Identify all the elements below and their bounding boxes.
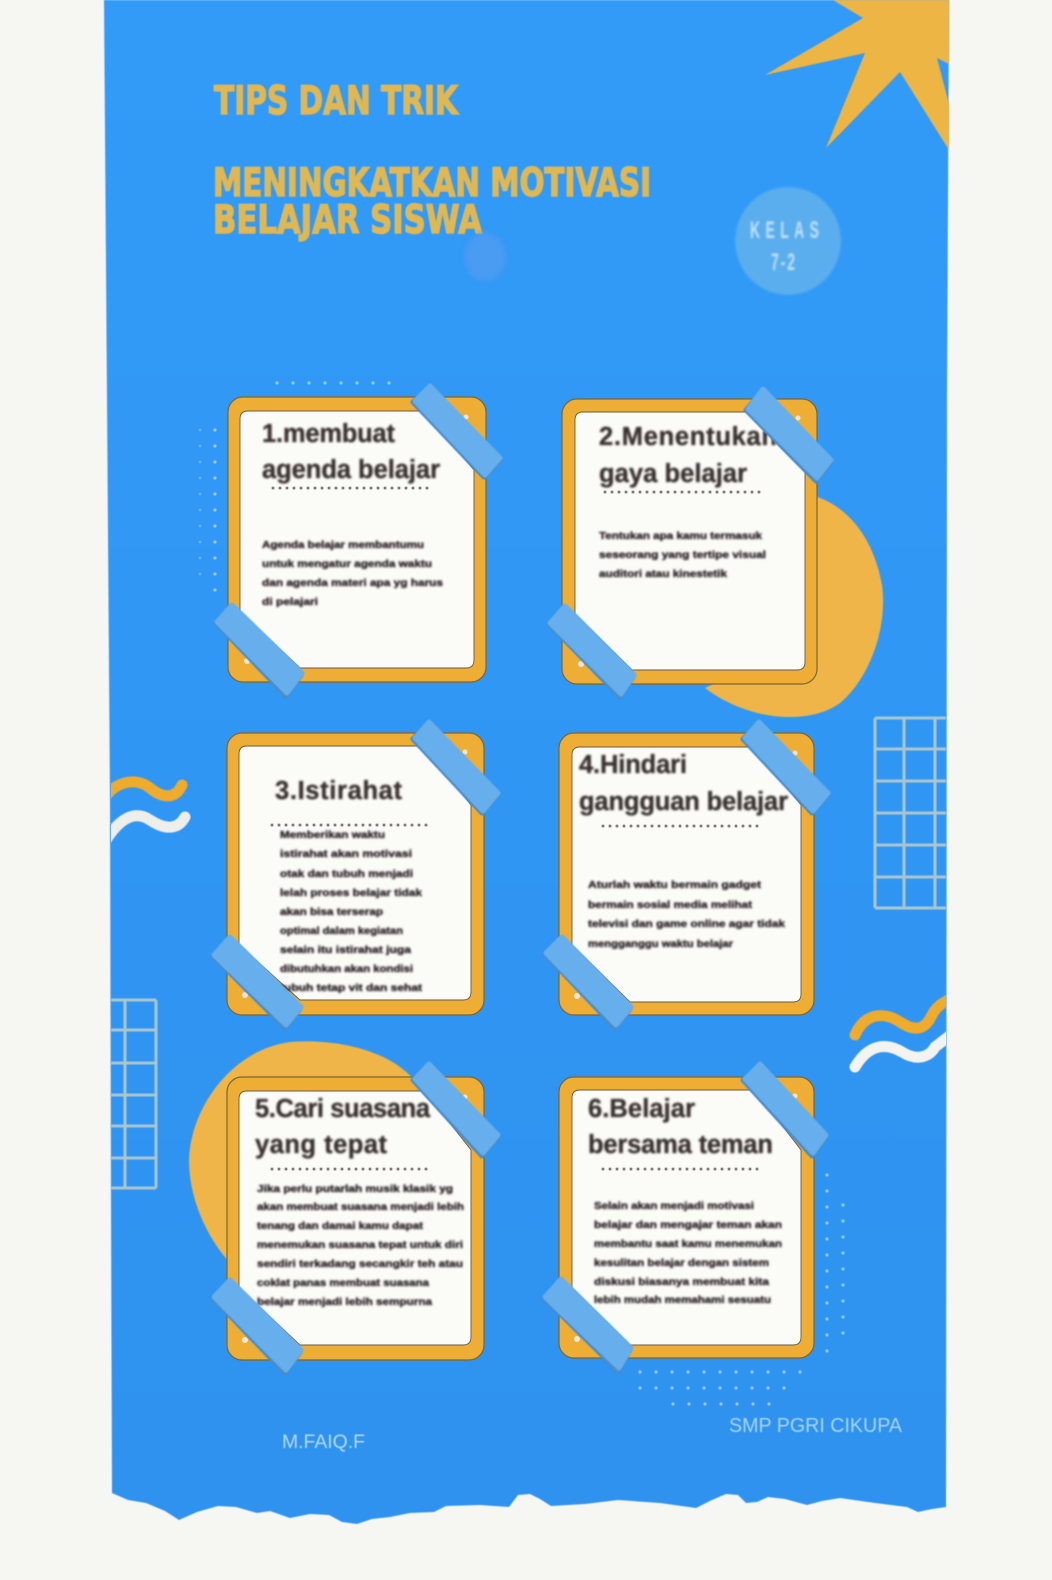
- heading 6: bersama teman: [588, 1131, 773, 1159]
- body text 3: otak dan tubuh menjadi: [280, 868, 413, 880]
- squiggle left: [106, 782, 185, 840]
- tape top-right: [746, 389, 831, 481]
- body text 6: Selain akan menjadi motivasi: [594, 1200, 754, 1212]
- body text 3: istirahat akan motivasi: [280, 848, 412, 860]
- body text 4: bermain sosial media melihat: [588, 899, 753, 911]
- heading 6: 6.Belajar: [588, 1095, 695, 1123]
- badge: kelas 7-2: [735, 187, 841, 295]
- panel: blue torn paper background: [104, 0, 949, 1524]
- body text 5: coklat panas membuat suasana: [257, 1277, 429, 1289]
- body text 1: untuk mengatur agenda waktu: [262, 558, 432, 570]
- body text 5: Jika perlu putarlah musik klasik yg: [257, 1183, 453, 1195]
- card 1: [228, 386, 500, 682]
- tape top-right: [743, 1064, 826, 1156]
- body text 1: Agenda belajar membantumu: [262, 539, 424, 551]
- squiggle right: [855, 998, 952, 1067]
- heading 5: [255, 1095, 431, 1159]
- card 6: [559, 1064, 826, 1358]
- body text 3: selain itu istirahat juga: [280, 944, 411, 956]
- dots around cards: [200, 383, 843, 1404]
- body text 5: [257, 1183, 464, 1308]
- poster: [103, 0, 950, 1525]
- body text 2: auditori atau kinestetik: [599, 568, 727, 580]
- body text 6: belajar dan mengajar teman akan: [594, 1219, 782, 1231]
- title: BELAJAR SISWA: [213, 198, 482, 243]
- body text 3: akan bisa terserap: [280, 906, 383, 918]
- body text 1: di pelajari: [262, 596, 318, 608]
- footer: school: SMP PGRI CIKUPA: [729, 1415, 903, 1437]
- card 5: [227, 1064, 498, 1360]
- body text 3: dibutuhkan akan kondisi: [280, 963, 413, 975]
- body text 5: belajar menjadi lebih sempurna: [257, 1296, 432, 1308]
- body text 4: televisi dan game online agar tidak: [588, 918, 785, 930]
- body text 5: tenang dan damai kamu dapat: [257, 1220, 424, 1232]
- card 3: [227, 722, 498, 1015]
- heading 3: 3.Istirahat: [275, 777, 402, 805]
- heading 4: [579, 751, 788, 816]
- badge: kelas 7-2: 7-2: [771, 249, 795, 276]
- body text 3: lelah proses belajar tidak: [280, 887, 422, 899]
- body text 3: Memberikan waktu: [280, 829, 385, 841]
- heading 1: agenda belajar: [262, 456, 440, 484]
- body text 6: kesulitan belajar dengan sistem: [594, 1257, 769, 1269]
- body text 4: mengganggu waktu belajar: [588, 938, 733, 950]
- heading 5: yang tepat: [255, 1131, 388, 1159]
- title: TIPS DAN TRIK: [214, 79, 459, 124]
- body text 3: optimal dalam kegiatan: [280, 925, 403, 937]
- body text 6: diskusi biasanya membuat kita: [594, 1276, 769, 1288]
- body text 6: membantu saat kamu menemukan: [594, 1238, 782, 1250]
- body text 5: akan membuat suasana menjadi lebih: [257, 1201, 464, 1213]
- body text 2: seseorang yang tertipe visual: [599, 549, 766, 561]
- body text 3: tubuh tetap vit dan sehat: [280, 982, 423, 994]
- tape top-right: [413, 1064, 498, 1156]
- badge: kelas 7-2: KELAS: [750, 217, 819, 244]
- grid left: [111, 1000, 156, 1188]
- body text 6: lebih mudah memahami sesuatu: [594, 1294, 771, 1306]
- heading 4: gangguan belajar: [579, 788, 788, 816]
- heading 5: 5.Cari suasana: [255, 1095, 431, 1123]
- heading 2: gaya belajar: [599, 460, 747, 488]
- heading 1: 1.membuat: [262, 420, 396, 448]
- heading 2: [599, 423, 777, 488]
- body text 5: menemukan suasana tepat untuk diri: [257, 1239, 463, 1251]
- body text 4: Aturlah waktu bermain gadget: [588, 879, 762, 891]
- body text 1: [262, 539, 443, 608]
- body text 2: Tentukan apa kamu termasuk: [599, 530, 762, 542]
- grid right: [875, 718, 946, 908]
- title: MENINGKATKAN MOTIVASI: [213, 161, 651, 206]
- tape top-right: [743, 722, 828, 813]
- heading 1: [262, 420, 440, 484]
- body text 4: [588, 879, 785, 950]
- yellow blob right: [705, 494, 883, 717]
- body text 1: dan agenda materi apa yg harus: [262, 577, 443, 589]
- tapes bottom-left: [213, 605, 634, 1373]
- footer: author: M.FAIQ.F: [282, 1432, 365, 1453]
- body text 6: [594, 1200, 782, 1306]
- tape top-right: [413, 722, 498, 813]
- yellow blob left: [189, 1041, 418, 1265]
- card 4: [559, 722, 828, 1015]
- tape top-right: [413, 386, 500, 477]
- decorative faint circle: [464, 233, 506, 281]
- title: [213, 79, 651, 243]
- body text 2: [599, 530, 766, 580]
- heading 4: 4.Hindari: [579, 751, 687, 779]
- card 2: [562, 389, 831, 684]
- heading 6: [588, 1095, 773, 1159]
- heading 2: 2.Menentukan: [599, 423, 777, 451]
- body text 3: [280, 829, 423, 994]
- body text 5: sendiri terkadang secangkir teh atau: [257, 1258, 463, 1270]
- icon: sun: [765, 0, 949, 150]
